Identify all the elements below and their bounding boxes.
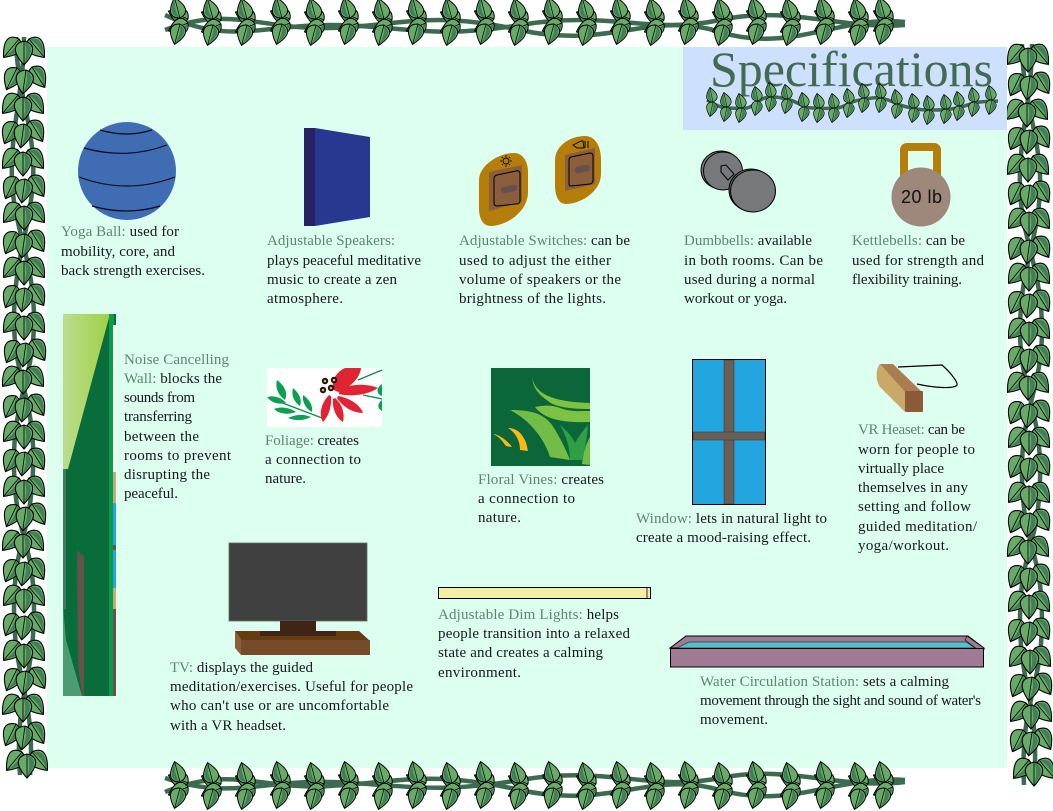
text: speakers: Adjustable Speakers: (267, 233, 395, 249)
text: kettlebells: used for strength and (852, 253, 984, 269)
icon: water station (670, 636, 984, 667)
text: vr headset: VR Heaset: can be (858, 422, 965, 438)
text: noise cancelling wall: disrupting the (124, 467, 210, 483)
text: tv: meditation/exercises. Useful for people (170, 679, 413, 695)
text: dumbbells: workout or yoga. (684, 291, 787, 307)
text: switches: brightness of the lights. (459, 291, 606, 307)
text: dumbbells: used during a normal (684, 272, 815, 288)
text: tv: who can't use or are uncomfortable (170, 698, 389, 714)
text: vr headset: yoga/workout. (858, 538, 949, 554)
icon: window (692, 360, 766, 504)
text: vr headset: themselves in any (858, 480, 968, 496)
text: floral vines: Floral Vines: creates (478, 472, 604, 488)
icon: yoga ball (78, 122, 176, 220)
text: kettlebells: flexibility training. (852, 272, 962, 288)
title block (683, 41, 1007, 130)
text: noise cancelling wall: Noise Cancelling (124, 352, 230, 368)
icon: vr headset (877, 364, 957, 412)
title vine decoration (705, 81, 998, 126)
icon: dim light (438, 588, 650, 598)
image: noise cancelling wall (63, 314, 116, 696)
text: vr headset: guided meditation/ (858, 519, 978, 535)
icon: kettlebell: 20 lb (901, 187, 942, 207)
text: switches: Adjustable Switches: can be (459, 233, 630, 249)
text: tv: with a VR headset. (170, 718, 286, 734)
text: water station: movement. (700, 712, 768, 728)
text: speakers: plays peaceful meditative (267, 253, 421, 269)
text: window: create a mood-raising effect. (636, 530, 811, 546)
text: floral vines: nature. (478, 510, 521, 526)
text: speakers: music to create a zen (267, 272, 398, 288)
text: vr headset: worn for people to (858, 442, 975, 458)
text: noise cancelling wall: rooms to prevent (124, 448, 232, 464)
text: noise cancelling wall: sounds from (124, 390, 195, 406)
icon: brightness switch (479, 153, 528, 226)
icon: tv (229, 543, 370, 655)
text: kettlebells: Kettlebells: can be (852, 233, 965, 249)
text: switches: used to adjust the either (459, 253, 611, 269)
vine border: left (0, 33, 54, 778)
text: vr headset: setting and follow (858, 499, 971, 515)
text: yoga ball: back strength exercises. (61, 263, 205, 279)
vine border: bottom (165, 760, 905, 811)
title: Specifications (710, 41, 993, 97)
icon: kettlebell (892, 147, 950, 226)
vine border: top (165, 0, 905, 47)
icon: volume switch (555, 136, 601, 204)
image: floral vines (491, 368, 590, 466)
text: floral vines: a connection to (478, 491, 575, 507)
text: noise cancelling wall: transferring (124, 409, 192, 425)
text: vr headset: virtually place (858, 461, 944, 477)
text: dumbbells: Dumbbells: available (684, 233, 812, 249)
icon: speaker (304, 128, 370, 226)
text: window: Window: lets in natural light to (636, 511, 827, 527)
image: foliage (267, 368, 382, 427)
text: dim lights: environment. (438, 665, 521, 681)
text: dim lights: Adjustable Dim Lights: helps (438, 607, 619, 623)
text: water station: movement through the sight and sound of water's (700, 693, 981, 709)
text: dim lights: state and creates a calming (438, 645, 604, 661)
text: dim lights: people transition into a relaxed (438, 626, 630, 642)
icon: dumbbell (701, 151, 776, 212)
text: speakers: atmosphere. (267, 291, 343, 307)
text: switches: volume of speakers or the (459, 272, 621, 288)
text: tv: TV: displays the guided (170, 660, 313, 676)
text: foliage: Foliage: creates (265, 433, 359, 449)
text: yoga ball: mobility, core, and (61, 244, 176, 260)
text: noise cancelling wall: peaceful. (124, 486, 178, 502)
text: yoga ball: Yoga Ball: used for (61, 224, 179, 240)
vine border: right (1000, 40, 1053, 786)
text: dumbbells: in both rooms. Can be (684, 253, 823, 269)
text: foliage: a connection to (265, 452, 361, 468)
text: noise cancelling wall: between the (124, 429, 199, 445)
text: noise cancelling wall: Wall: blocks the (124, 371, 222, 387)
text: water station: Water Circulation Station: sets a calming (700, 674, 949, 690)
text: foliage: nature. (265, 471, 306, 487)
